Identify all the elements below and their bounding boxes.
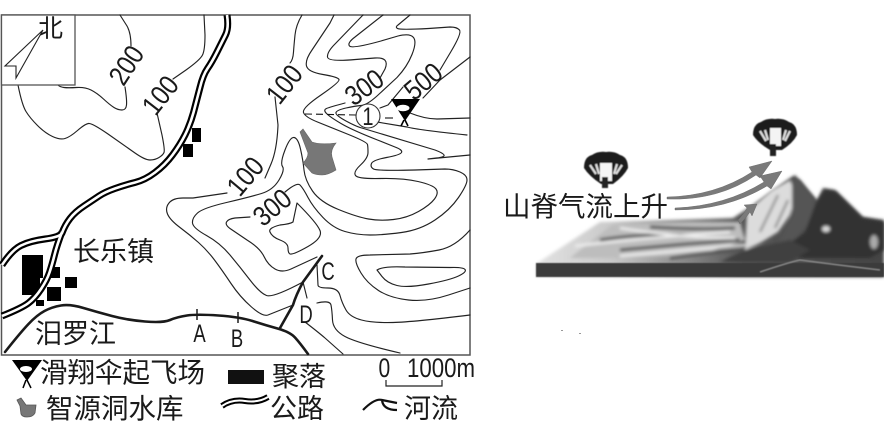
section line 1 bbox=[305, 103, 393, 131]
place labels bbox=[35, 237, 335, 353]
road bbox=[2, 15, 228, 316]
specks bbox=[561, 330, 581, 334]
section line 1: 1 bbox=[362, 103, 374, 131]
legend: settlement: 聚落 bbox=[272, 362, 326, 392]
legend: settlement bbox=[228, 362, 326, 392]
place labels: A bbox=[193, 319, 206, 348]
place labels: B bbox=[231, 324, 243, 353]
place labels: C bbox=[321, 257, 335, 286]
place labels: 汨罗江 bbox=[35, 319, 116, 349]
settlements bbox=[22, 128, 201, 306]
reservoir bbox=[300, 129, 336, 175]
place labels: 长乐镇 bbox=[73, 237, 154, 267]
paraglider high bbox=[753, 119, 797, 156]
section ticks A and B bbox=[197, 309, 238, 323]
legend: scale bar: 0 bbox=[378, 354, 390, 384]
legend bbox=[12, 353, 475, 424]
legend: road: 公路 bbox=[270, 394, 324, 424]
contour value labels: 500 bbox=[398, 56, 449, 106]
river bbox=[5, 256, 322, 354]
legend: river bbox=[363, 394, 458, 424]
panel: ridge lift illustration bbox=[503, 119, 884, 334]
paraglider low bbox=[584, 152, 628, 188]
contour value labels bbox=[102, 40, 449, 232]
legend: road bbox=[222, 394, 324, 424]
launch site icon bbox=[391, 99, 420, 126]
contour value labels: 100 bbox=[135, 69, 185, 121]
legend: reservoir: 智源洞水库 bbox=[46, 393, 184, 424]
panel: contour map bbox=[2, 15, 470, 355]
contour value labels: 100 bbox=[220, 151, 270, 202]
terrain bbox=[536, 175, 884, 277]
airflow arrows bbox=[667, 161, 782, 224]
legend: scale bar bbox=[378, 353, 475, 386]
contour lines bbox=[18, 15, 470, 354]
contour value labels: 300 bbox=[247, 182, 298, 232]
place labels: D bbox=[299, 300, 313, 329]
contour value labels: 100 bbox=[259, 58, 309, 110]
inset: north arrow bbox=[2, 15, 75, 85]
contour value labels: 200 bbox=[102, 40, 151, 91]
legend: scale bar: 1000m bbox=[407, 353, 475, 383]
inset: north arrow: 北 bbox=[38, 15, 63, 43]
ridge lift label: 山脊气流上升 bbox=[503, 191, 668, 222]
contour value labels: 300 bbox=[339, 62, 390, 112]
legend: river: 河流 bbox=[404, 394, 458, 424]
legend: launch site: 滑翔伞起飞场 bbox=[40, 357, 205, 388]
